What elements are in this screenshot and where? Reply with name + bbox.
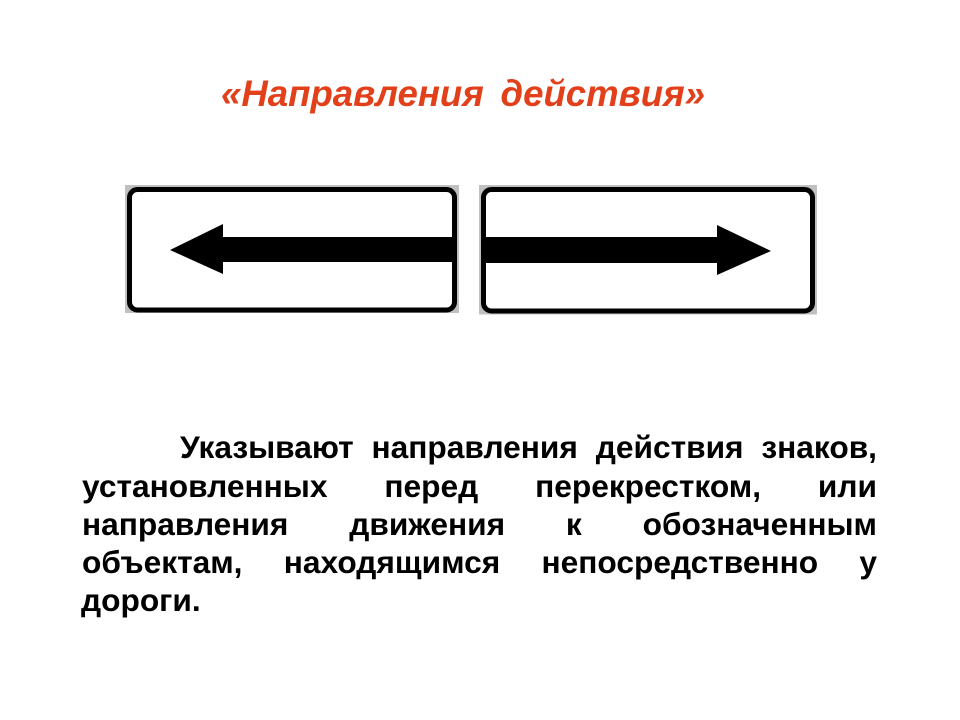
- title: «Направления действия»: [221, 73, 705, 114]
- sign: right arrow: [479, 185, 817, 314]
- sign: left arrow: [125, 185, 459, 313]
- body text: направления движения к обозначенным: [82, 506, 877, 542]
- body text: дороги.: [81, 582, 201, 618]
- body text: Указывают направления действия знаков,: [180, 429, 877, 465]
- body text: объектам, находящимся непосредственно у: [82, 544, 877, 580]
- body text: установленных перед перекрестком, или: [82, 468, 877, 504]
